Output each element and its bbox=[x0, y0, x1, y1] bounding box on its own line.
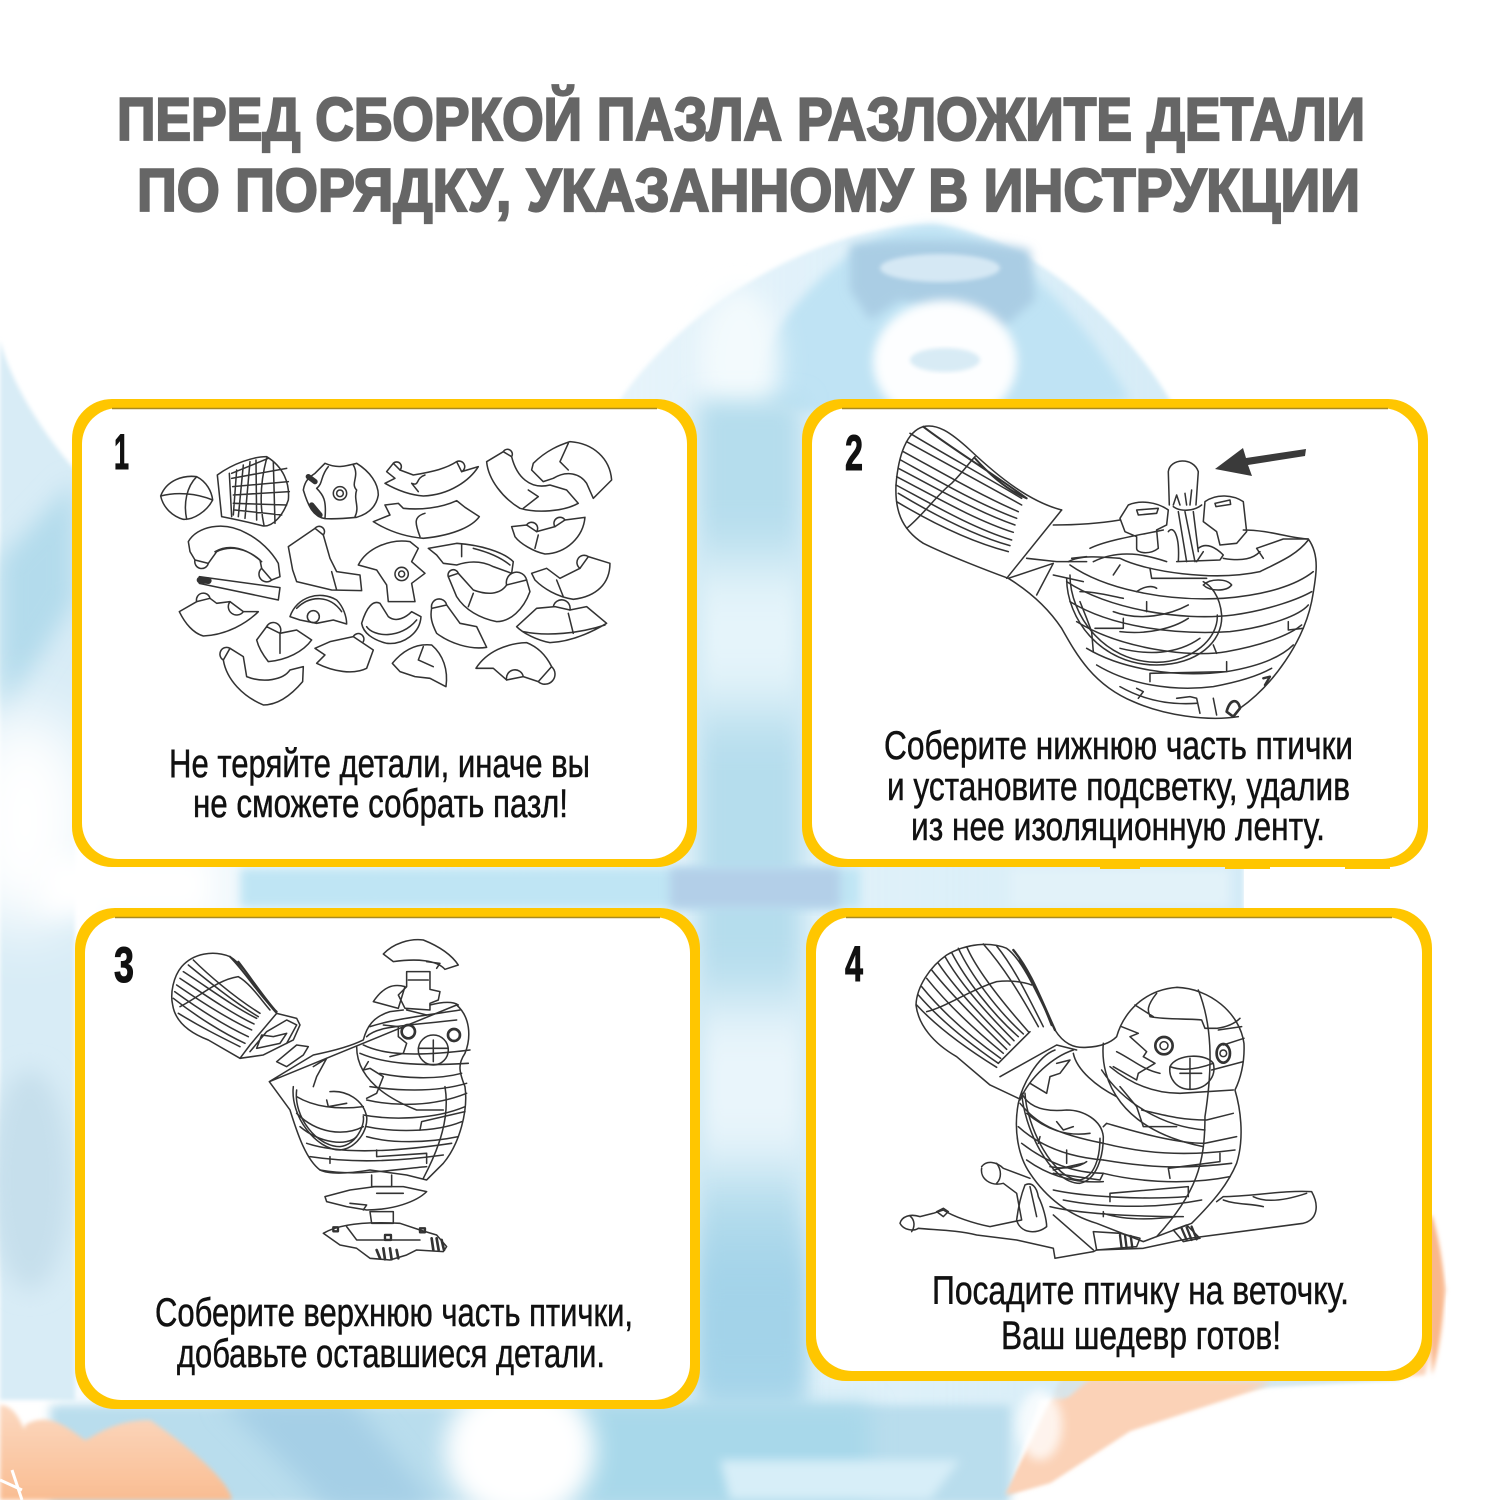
number 2: 2 bbox=[845, 425, 863, 481]
title bbox=[117, 86, 1365, 224]
illustration: lower half of bird with light bbox=[896, 426, 1316, 718]
puzzle knobs bbox=[195, 449, 588, 684]
text: step 4 bbox=[932, 1269, 1349, 1358]
text: step 1: Не теряйте детали, иначе вы bbox=[169, 742, 590, 786]
text: step 2 bbox=[884, 724, 1353, 849]
orange right foot bbox=[1005, 1380, 1272, 1495]
left wing bbox=[0, 340, 75, 1400]
text: step 3: Соберите верхнюю часть птички, bbox=[155, 1291, 633, 1335]
central gap tones bbox=[697, 400, 802, 1400]
number 1: 1 bbox=[114, 424, 129, 480]
panel: step 4 bbox=[806, 908, 1432, 1381]
panel: step 3 bbox=[75, 908, 700, 1409]
title: ПЕРЕД СБОРКОЙ ПАЗЛА РАЗЛОЖИТЕ ДЕТАЛИ bbox=[117, 86, 1365, 153]
orange left foot bbox=[0, 1405, 232, 1500]
illustration: finished bird on branch bbox=[900, 944, 1316, 1258]
arrow bbox=[1215, 448, 1306, 476]
branch bbox=[900, 1162, 1316, 1258]
panel: step 1 bbox=[72, 399, 697, 867]
light bbox=[1168, 461, 1202, 510]
text: step 2: из нее изоляционную ленту. bbox=[911, 805, 1325, 849]
illustration: exploded bird bbox=[172, 940, 470, 1260]
gap between rows bbox=[240, 868, 860, 908]
illustration: puzzle pieces bbox=[161, 442, 612, 705]
orange right wing bbox=[1005, 1215, 1446, 1495]
text: step 3: добавьте оставшиеся детали. bbox=[177, 1332, 605, 1376]
panel: step 2 bbox=[802, 399, 1428, 869]
text: step 4: Посадите птичку на веточку. bbox=[932, 1269, 1349, 1313]
title: ПО ПОРЯДКУ, УКАЗАННОМУ В ИНСТРУКЦИИ bbox=[137, 157, 1360, 224]
text: step 4: Ваш шедевр готов! bbox=[1001, 1314, 1281, 1358]
number 4: 4 bbox=[845, 936, 863, 992]
number 3: 3 bbox=[114, 937, 134, 993]
text: step 3 bbox=[155, 1291, 633, 1376]
text: step 2: и установите подсветку, удалив bbox=[887, 765, 1350, 809]
crystal head top bbox=[740, 225, 1130, 420]
text: step 1: не сможете собрать пазл! bbox=[193, 782, 568, 826]
crystal body bbox=[60, 225, 1400, 1500]
orange wing tip bbox=[1425, 1215, 1444, 1375]
bottom strip bbox=[50, 1405, 1010, 1500]
text: step 1 bbox=[169, 742, 590, 826]
text: step 2: Соберите нижнюю часть птички bbox=[884, 724, 1353, 768]
